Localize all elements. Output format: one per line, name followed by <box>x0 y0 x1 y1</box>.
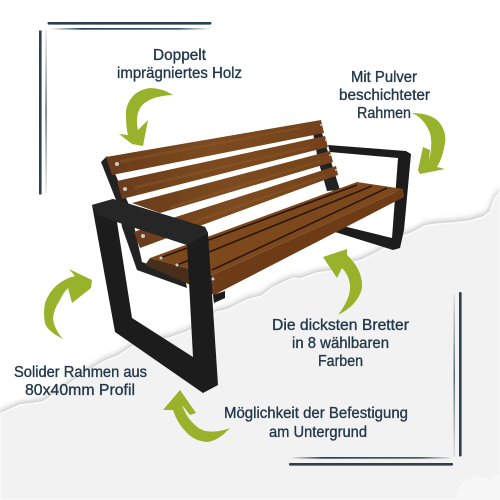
rear back support <box>313 133 340 191</box>
label: Mit Pulver beschichteter Rahmen: beschichteter <box>339 87 430 104</box>
arrow: powder coated frame <box>412 113 445 174</box>
label: Befestigung am Untergrund <box>224 405 408 441</box>
label: Doppelt impraegniertes Holz <box>117 47 242 82</box>
label: Mit Pulver beschichteter Rahmen <box>339 69 430 122</box>
arrow: solid frame <box>44 269 92 339</box>
arrow: mounting to the ground <box>163 390 230 442</box>
left back support <box>101 156 187 288</box>
arrow: thickest boards <box>323 249 362 315</box>
label: Die dicksten Bretter: Die dicksten Bretter <box>272 317 409 334</box>
label: Die dicksten Bretter: in 8 wählbaren <box>292 335 389 352</box>
label: Doppelt impraegniertes Holz: imprägniertes Holz <box>117 65 242 82</box>
label: Mit Pulver beschichteter Rahmen: Rahmen <box>357 105 411 122</box>
decorative frame: top left <box>39 22 212 194</box>
bench photo illustration <box>92 120 411 393</box>
front frame highlight <box>92 199 208 245</box>
label: Doppelt impraegniertes Holz: Doppelt <box>153 47 207 64</box>
label: Mit Pulver beschichteter Rahmen: Mit Pulver <box>351 69 417 86</box>
label: Solider Rahmen: 80x40mm Profil <box>25 382 135 399</box>
right armrest and frame <box>328 145 411 250</box>
screws <box>115 124 337 238</box>
seat slats <box>145 182 404 303</box>
torn paper background <box>0 192 500 500</box>
label: Solider Rahmen <box>14 364 147 399</box>
label: Solider Rahmen: Solider Rahmen aus <box>14 364 147 381</box>
decorative frame: bottom right <box>289 292 462 466</box>
label: Die dicksten Bretter <box>272 317 409 370</box>
front frame <box>92 199 218 393</box>
arrow: impregnated wood <box>119 88 173 146</box>
label: Die dicksten Bretter: Farben <box>318 353 363 370</box>
label: Befestigung am Untergrund: Möglichkeit der Befestigung <box>224 405 408 422</box>
back slats <box>106 120 338 248</box>
label: Befestigung am Untergrund: am Untergrund <box>269 424 367 441</box>
